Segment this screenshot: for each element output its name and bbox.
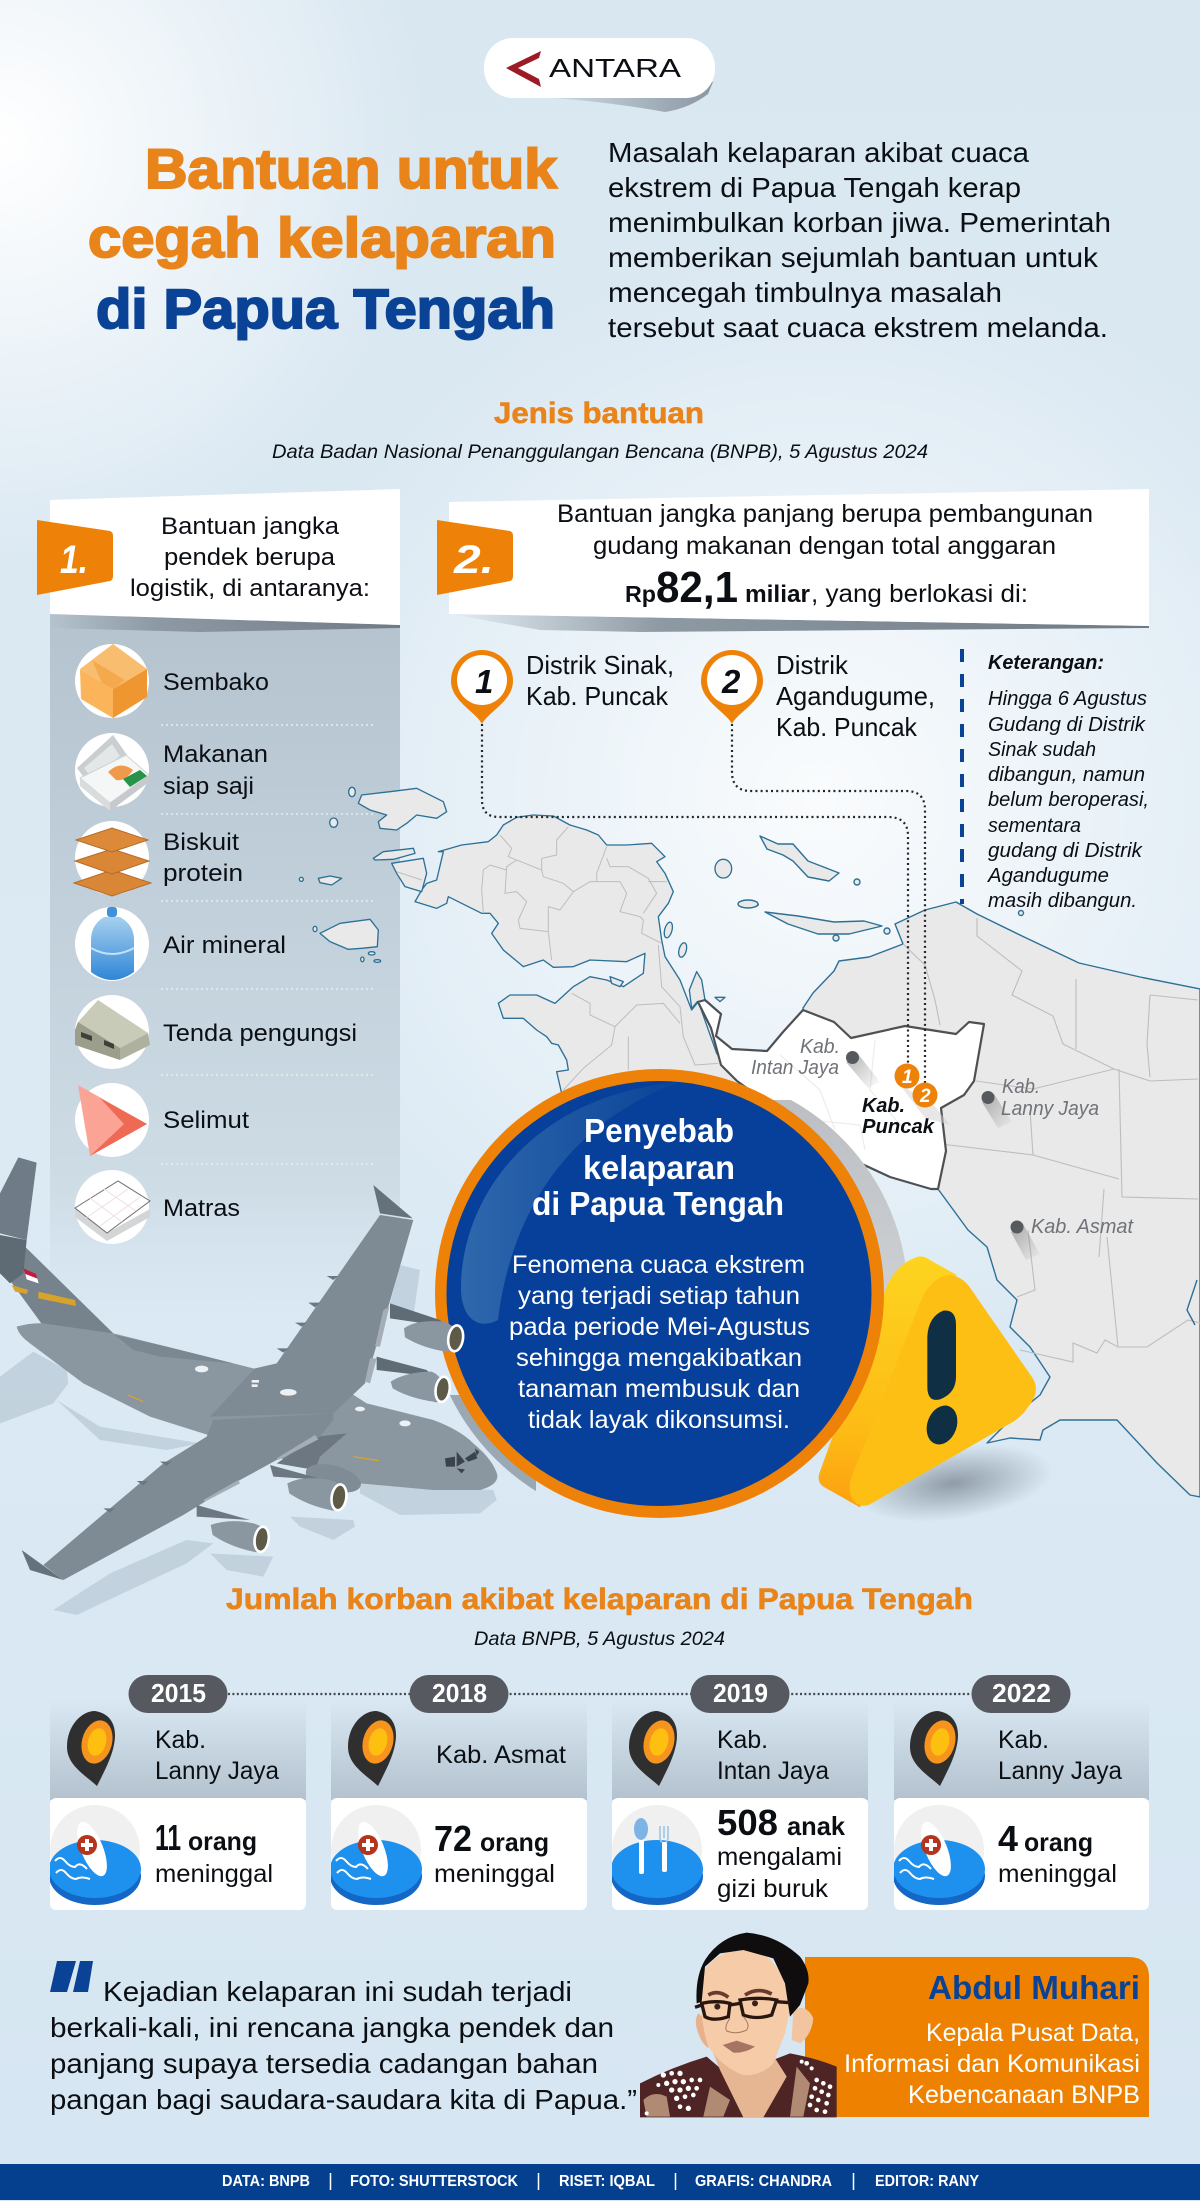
card 2022: 4 [998,1818,1018,1859]
card 2018: orang [480,1827,549,1857]
location 1 label [526,650,674,711]
warning sign [819,1256,1057,1534]
quote: Kejadian kelaparan ini sudah terjadi [103,1976,572,2007]
panel 1 header: Bantuan jangka [161,513,340,540]
map: eastern land [803,902,1200,1497]
note: Keterangan: Agandugume [986,864,1109,887]
intro text: mencegah timbulnya masalah [608,277,1002,308]
card 2022 [893,1675,1149,1910]
heading: Jenis bantuan: Data Badan Nasional Penanggulangan Bencana (BNPB), 5 Agustus 2024 [272,442,928,463]
item: Biskuit protein: protein [163,860,243,887]
note: Keterangan: Keterangan: [988,652,1104,674]
fin and tail [0,1157,37,1240]
intro text: menimbulkan korban jiwa. Pemerintah [608,207,1111,238]
left wing [43,1413,333,1580]
fuselage [17,1323,497,1490]
note: Keterangan [962,649,1149,912]
portrait: Abdul Muhari [640,1933,837,2117]
item: Tenda pengungsi [75,995,357,1069]
map markers and labels: Intan Jaya [751,1057,839,1079]
card 2018: meninggal [434,1860,555,1888]
card 2018 [330,1675,587,1910]
map markers and labels: 2 [919,1086,931,1107]
item: Makanan siap saji [75,733,268,811]
intro text: memberikan sejumlah bantuan untuk [608,242,1099,273]
note: Keterangan: Sinak sudah [988,738,1096,761]
panel: short-term aid background [50,612,400,1332]
quote: berkali-kali, ini rencana jangka pendek dan [50,2012,614,2043]
footer credits: EDITOR: RANY [875,2173,979,2190]
map markers and labels: Kab. [862,1095,905,1117]
card 2019: Intan Jaya [717,1757,829,1785]
timeline card backgrounds [50,1700,1149,1800]
map markers and labels: Kab. Asmat [1031,1216,1134,1238]
card 2022: 2022 [992,1678,1051,1708]
location pin 1: 1 [475,663,493,700]
panel: cause circle: Penyebab [584,1112,734,1149]
card 2022: Lanny Jaya [998,1757,1122,1785]
item: Selimut: Selimut [163,1107,249,1134]
card 2022: orang [1024,1827,1093,1857]
panel: cause circle: yang terjadi setiap tahun [518,1282,800,1310]
title: Bantuan untuk [145,137,558,200]
heading: Jenis bantuan [272,397,928,463]
card 2018: Kab. Asmat [436,1741,566,1769]
logo: ANTARA [484,38,715,112]
card 2019: 2019 [713,1678,768,1708]
card 2015: Kab. [155,1726,206,1754]
panel: cause circle: tidak layak dikonsumsi. [528,1406,790,1434]
item: Matras [75,1170,240,1244]
speaker panel: Kepala Pusat Data, [926,2019,1140,2047]
location 2 label: Distrik [776,650,849,680]
title: cegah kelaparan [88,206,556,269]
plane shadows [0,1265,497,1615]
card 2018: 2018 [432,1678,487,1708]
note: Keterangan: sementara [988,814,1081,837]
item: Makanan siap saji: Makanan [163,741,268,768]
intro text: ekstrem di Papua Tengah kerap [608,172,1021,203]
map markers and labels: Lanny Jaya [1001,1098,1099,1120]
card 2022: Kab. [998,1726,1049,1754]
map markers and labels: 1 [902,1067,913,1088]
map of Papua [299,787,1200,1497]
panel: cause circle: kelaparan [583,1149,735,1186]
heading: Jumlah korban [226,1583,973,1650]
card 2015: 11 [155,1817,181,1858]
panel 2 header [437,489,1149,632]
map markers and labels [751,1036,1134,1260]
item: Air mineral: Air mineral [163,932,286,959]
panel: cause circle: pada periode Mei-Agustus [509,1313,810,1341]
panel 2 header: , yang berlokasi di: [811,580,1028,608]
panel: cause circle: sehingga mengakibatkan [516,1344,802,1372]
note: Keterangan: dibangun, namun [988,763,1145,786]
card 2015: 2015 [151,1678,206,1708]
location pin 2: 2 [721,663,741,700]
panel: cause circle [435,1069,884,1518]
footer credits: GRAFIS: CHANDRA [695,2173,832,2190]
footer credits: DATA: BNPB [222,2173,310,2190]
right wing [210,1215,413,1417]
panel: cause circle: di Papua Tengah [532,1185,784,1222]
card 2015: Lanny Jaya [155,1757,279,1785]
location 2 label: Agandugume, [776,681,935,711]
map markers and labels: Kab. [800,1036,840,1058]
location 1 label: Kab. Puncak [526,681,669,711]
item: Selimut [75,1083,249,1157]
panel 1 header [37,489,400,632]
card 2018: 72 [434,1818,472,1859]
card 2022: meninggal [998,1860,1117,1888]
card 2019: Kab. [717,1726,768,1754]
speaker panel: Informasi dan Komunikasi [844,2050,1140,2078]
title [88,137,558,340]
panel 2 header: 82,1 [656,563,738,612]
map: district borders east [903,918,1200,1362]
item: Tenda pengungsi: Tenda pengungsi [163,1020,357,1047]
card 2015: meninggal [155,1860,273,1888]
note: Keterangan: gudang di Distrik [988,839,1144,862]
panel 1 header: pendek berupa [164,544,336,571]
plane details [195,1366,411,1426]
map markers and labels: Puncak [862,1116,935,1138]
footer credits: RISET: IQBAL [559,2173,655,2190]
heading: Jumlah korban: Jumlah korban akibat kelaparan di Papua Tengah [226,1583,973,1616]
note: Keterangan: masih dibangun. [988,889,1137,912]
footer credits: FOTO: SHUTTERSTOCK [350,2173,518,2190]
panel 1 list items [74,644,373,1244]
heading: Jenis bantuan: Jenis bantuan [494,397,704,430]
quote: pangan bagi saudara-saudara kita di Papua.” [50,2084,637,2115]
panel 1 header: logistik, di antaranya: [130,575,370,602]
card 2019: anak [787,1811,846,1841]
title: di Papua Tengah [96,277,555,340]
map: northern islands [738,836,1200,1497]
card 2019: gizi buruk [717,1875,829,1903]
card 2015: orang [188,1826,257,1856]
panel 2 header: miliar [745,581,810,608]
item: Biskuit protein [74,821,243,896]
speaker panel [805,1957,1149,2117]
footer credits [0,2164,1200,2201]
location 2 label [776,650,935,742]
victims timeline [49,1675,1149,1910]
badge 1 [37,520,113,595]
cargo plane illustration [0,1157,497,1615]
panel 2 header: gudang makanan dengan total anggaran [593,532,1056,560]
quote: panjang supaya tersedia cadangan bahan [50,2048,598,2079]
map: Papua Tengah highlighted region [698,1000,984,1189]
item: Matras: Matras [163,1195,240,1222]
card 2015 [49,1675,306,1910]
panel 2 header: Rp [625,581,656,607]
intro text: Masalah kelaparan akibat cuaca [608,137,1029,168]
logo: ANTARA: ANTARA [549,53,682,83]
note: Keterangan: belum beroperasi, [988,788,1149,811]
engines [197,1303,466,1554]
item: Sembako [75,644,269,718]
note: Keterangan: Hingga 6 Agustus [988,687,1147,710]
panel: cause circle: Fenomena cuaca ekstrem [512,1251,805,1279]
location pin 2 [701,650,763,724]
map markers and labels: Kab. [1002,1076,1040,1098]
speaker panel: Kebencanaan BNPB [908,2081,1140,2109]
badge 2: 2. [453,538,494,582]
dotted routes from pins to map [482,724,925,1085]
panel 2 header: Bantuan jangka panjang berupa pembangunan [557,500,1093,528]
heading: Jumlah korban: Data BNPB, 5 Agustus 2024 [474,1629,725,1650]
location 1 label: Distrik Sinak, [526,650,674,680]
quote [50,1961,637,2115]
item: Sembako: Sembako [163,669,269,696]
item: Air mineral [75,907,286,981]
card 2019 [611,1675,868,1910]
circle shadow [426,1060,908,1526]
intro text [608,137,1111,343]
map: western land and islands [299,787,758,1160]
intro text: tersebut saat cuaca ekstrem melanda. [608,312,1108,343]
card 2019: 508 [717,1802,778,1843]
item: Makanan siap saji: siap saji [163,773,254,800]
speaker panel: Abdul Muhari [928,1969,1140,2006]
location 2 label: Kab. Puncak [776,712,918,742]
card 2019: mengalami [717,1843,842,1871]
panel: cause circle: tanaman membusuk dan [518,1375,800,1403]
item: Biskuit protein: Biskuit [163,829,239,856]
badge 2 [437,520,513,595]
quote mark [50,1961,93,1992]
location pin 1 [451,650,513,724]
badge 1: 1. [60,538,88,582]
note: Keterangan: Gudang di Distrik [988,713,1147,736]
